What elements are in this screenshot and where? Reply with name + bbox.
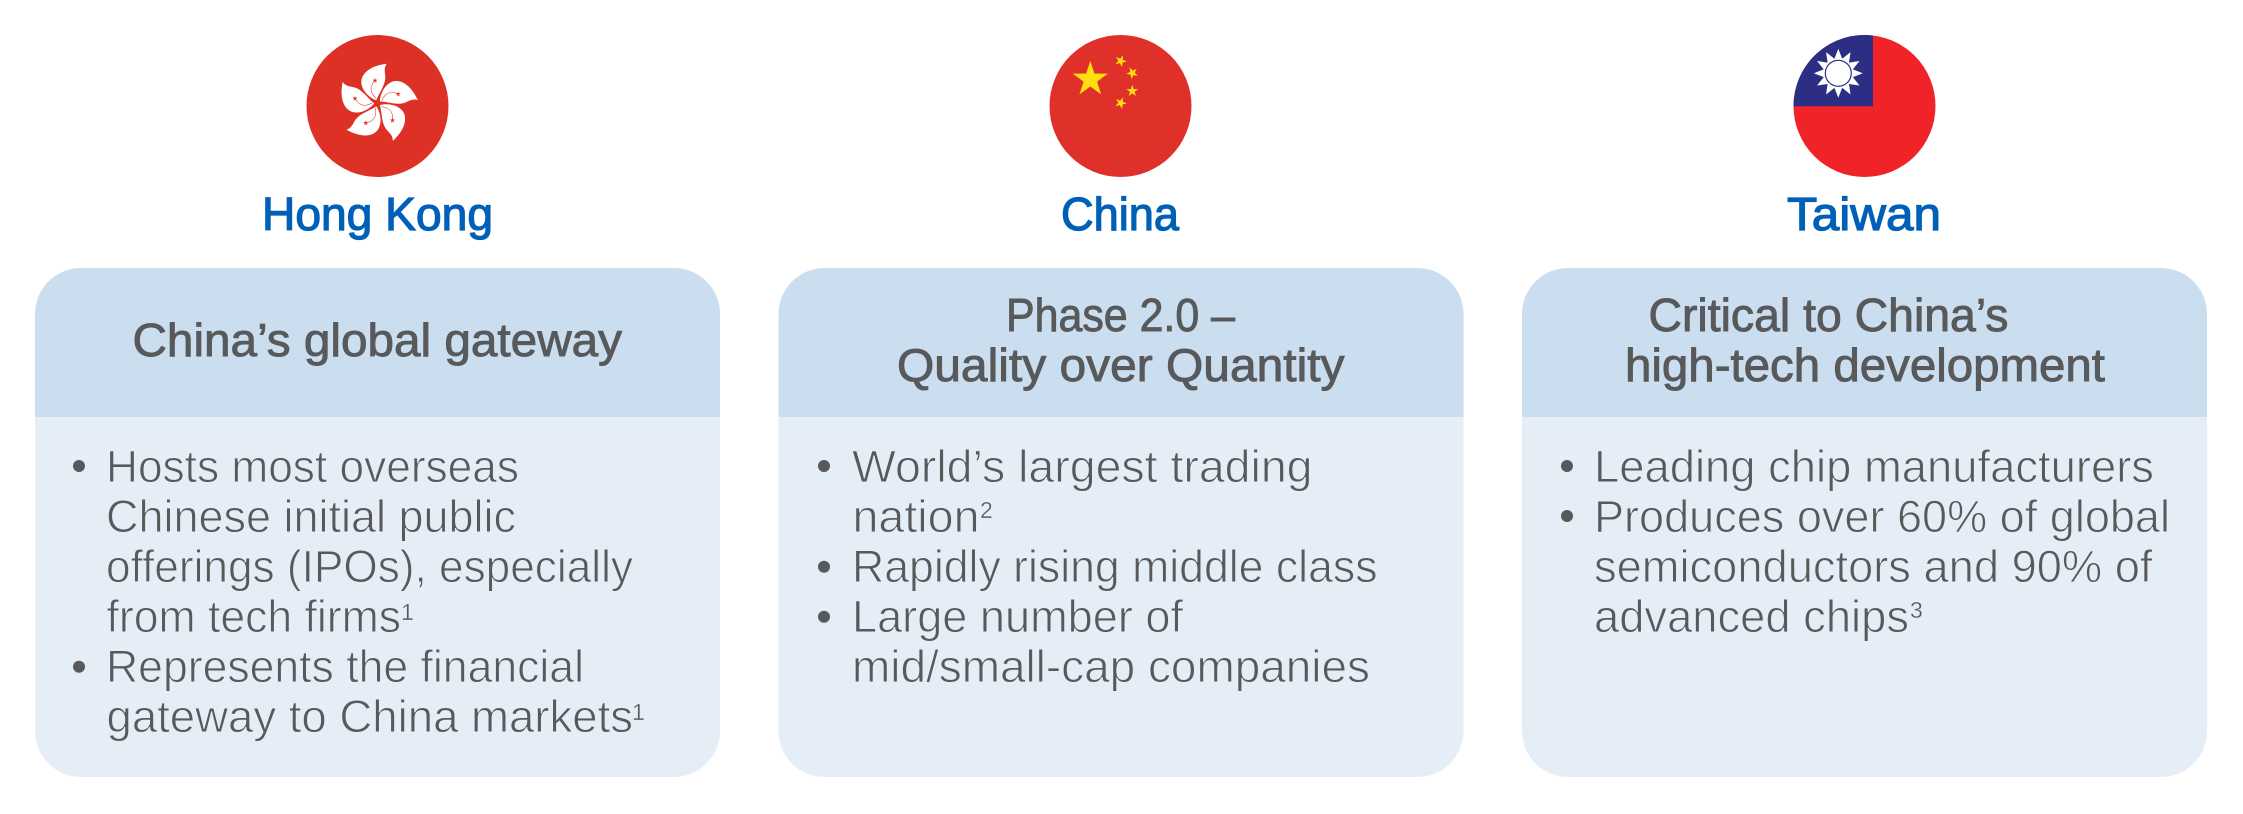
heading: China: China	[1061, 188, 1179, 240]
card header background	[778, 268, 1464, 417]
panel: China card	[778, 268, 1464, 777]
bullet list: offerings (IPOs), especially	[106, 541, 633, 592]
column: Taiwan	[1522, 35, 2207, 777]
bullet list: mid/small-cap companies	[852, 641, 1370, 692]
bullet list: 1	[632, 699, 645, 725]
card heading	[1625, 289, 2105, 391]
card header background	[1522, 268, 2207, 417]
card body background	[35, 417, 720, 777]
card header background	[35, 268, 720, 417]
bullet list: nation	[852, 491, 980, 542]
bullet list: 1	[401, 599, 414, 625]
bullet list: Leading chip manufacturers	[1594, 441, 2154, 492]
icon: Hong Kong flag	[306, 35, 448, 177]
panel: Hong Kong card	[35, 268, 720, 777]
heading: Taiwan: Taiwan	[1787, 188, 1941, 240]
bullet list: gateway to China markets	[106, 691, 633, 742]
icon: Taiwan flag	[1793, 35, 1936, 177]
bullet list: Rapidly rising middle class	[852, 541, 1378, 592]
bullet list: Chinese initial public	[106, 491, 516, 542]
card heading: Critical to China’s	[1648, 289, 2008, 341]
card heading: high-tech development	[1625, 339, 2105, 391]
bullet list: 2	[980, 497, 993, 523]
column: China	[778, 35, 1464, 777]
bullet list	[818, 441, 1378, 692]
bullet list: advanced chips	[1594, 591, 1909, 642]
card heading	[897, 289, 1344, 391]
bullet list: semiconductors and 90% of	[1594, 541, 2153, 592]
card body background	[1522, 417, 2207, 777]
bullet list: Produces over 60% of global	[1594, 491, 2170, 542]
card heading: China’s global gateway	[132, 314, 622, 366]
card body background	[778, 417, 1464, 777]
bullet list: 3	[1910, 597, 1923, 623]
bullet list: Represents the financial	[106, 641, 584, 692]
card heading: Quality over Quantity	[897, 339, 1344, 391]
bullet list: Large number of	[852, 591, 1183, 642]
icon: China flag	[1050, 35, 1192, 177]
bullet list	[73, 441, 645, 742]
panel: Taiwan card	[1522, 268, 2207, 777]
column: Hong Kong	[35, 35, 720, 777]
bullet list: from tech firms	[106, 591, 401, 642]
card heading: Phase 2.0 –	[1006, 289, 1235, 341]
bullet list	[1561, 441, 2170, 642]
bullet list: World’s largest trading	[852, 441, 1312, 492]
heading: Hong Kong: Hong Kong	[262, 188, 493, 240]
bullet list: Hosts most overseas	[106, 441, 519, 492]
